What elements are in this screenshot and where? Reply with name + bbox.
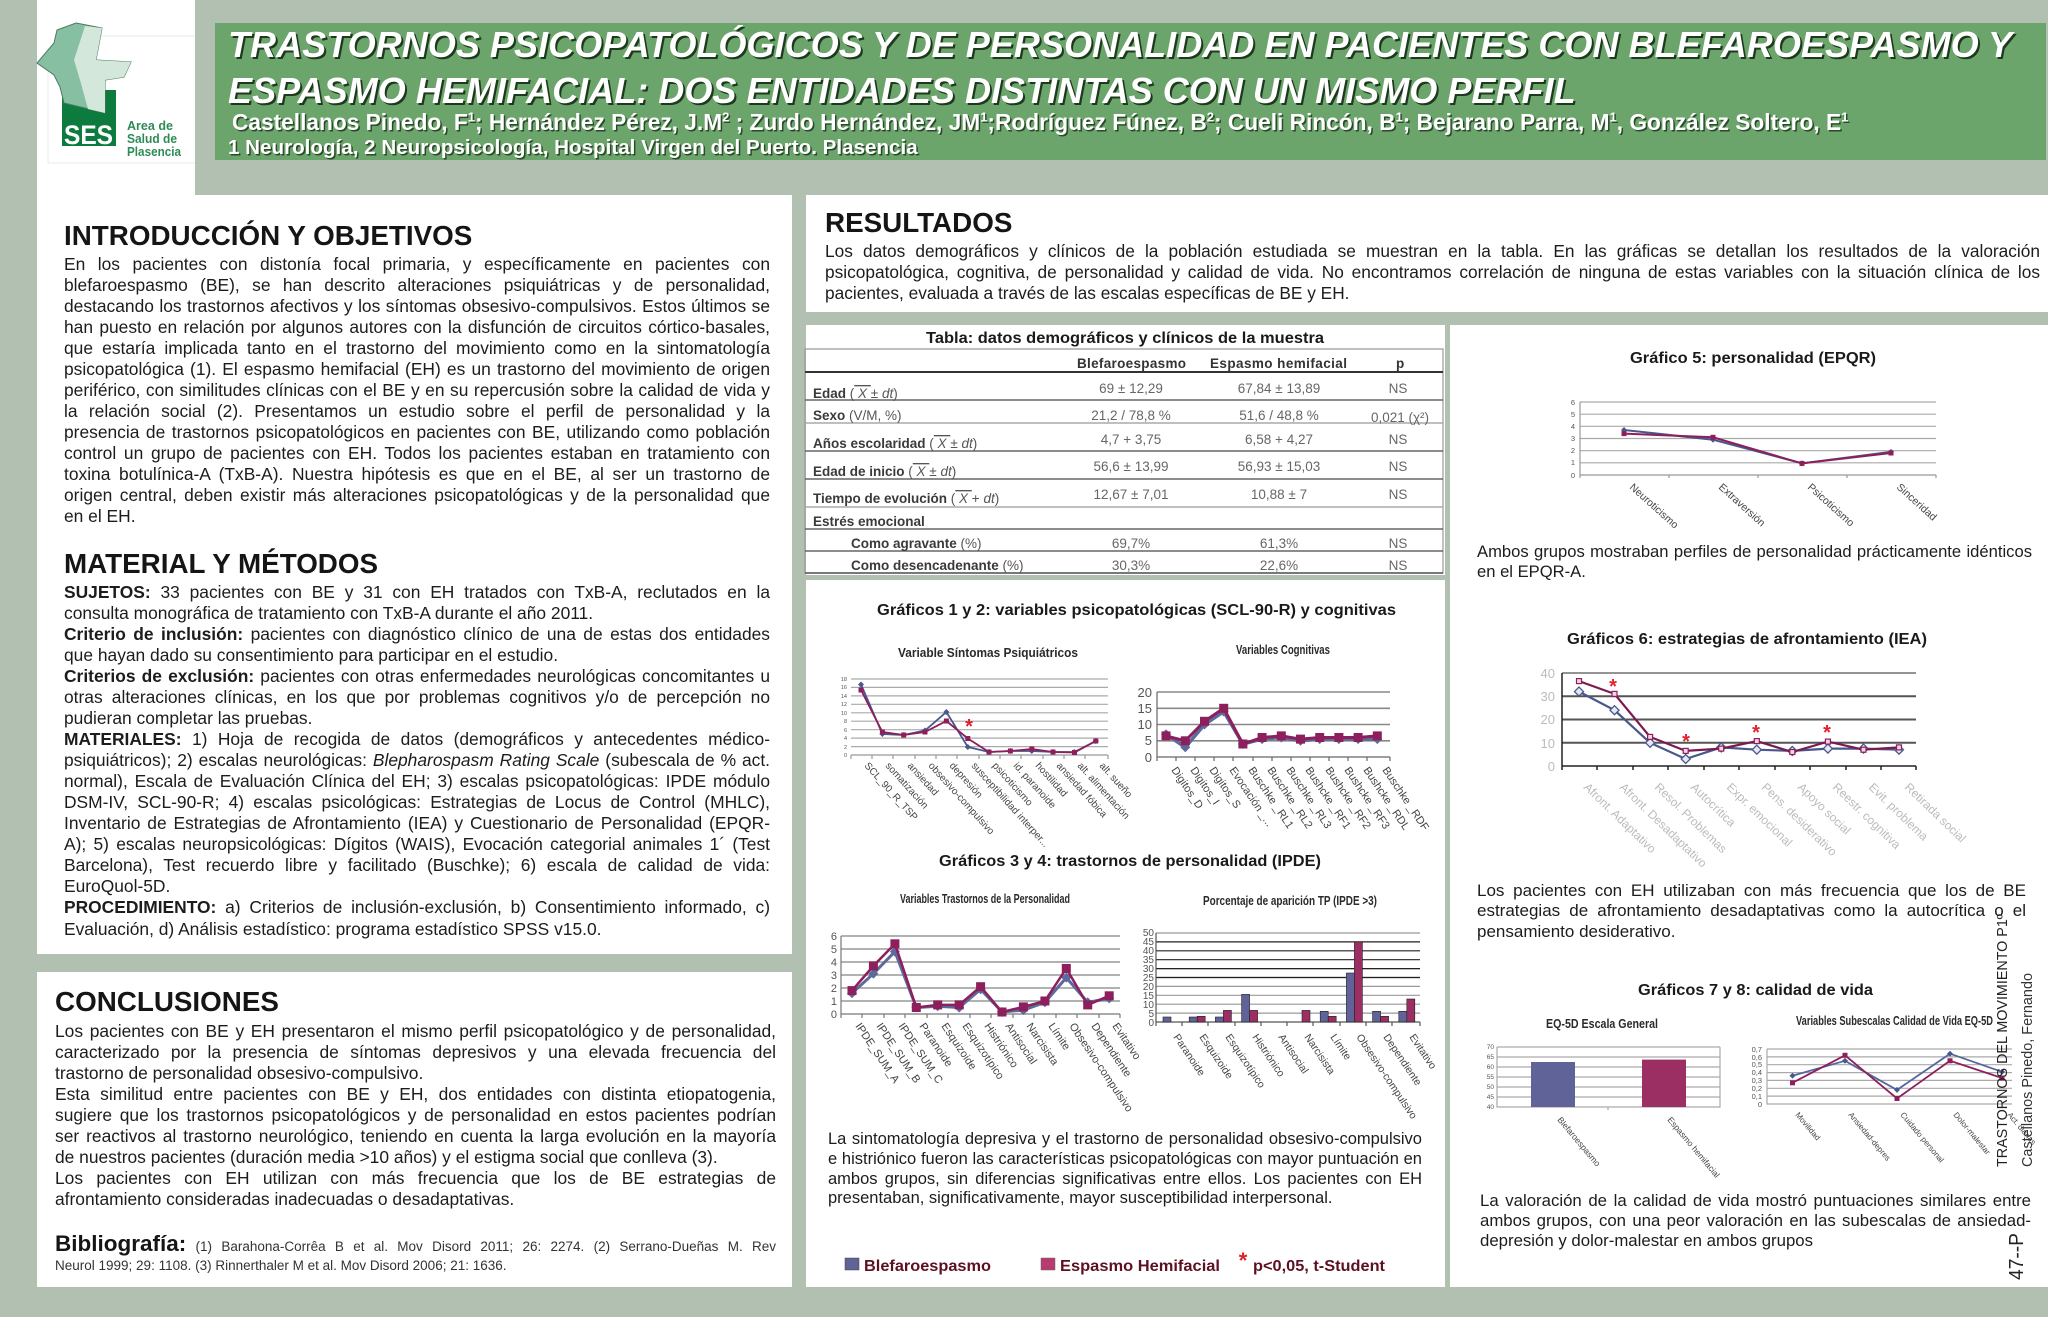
text: introducción: presencia de trastornos psicopatológicos en pacientes con BE, utilizando como población bbox=[64, 422, 770, 442]
chart 4: porcentaje de aparición TP: Narcisista bbox=[1302, 1032, 1337, 1077]
chart 4: porcentaje de aparición TP: Antisocial bbox=[1276, 1032, 1311, 1076]
chart 7: EQ-5D escala general: 50 bbox=[1487, 1084, 1494, 1091]
chart 6: estrategias de afrontamiento: Autocrítica bbox=[1688, 780, 1739, 830]
row: como desencadenante bbox=[851, 558, 1407, 573]
text: introducción: que estaría implicada tanto en el trastorno del movimiento como en la sintomatología bbox=[64, 338, 770, 358]
chart 1: variable síntomas psiquiátricos: somatización bbox=[883, 761, 930, 811]
chart 3: variables trastornos de la personalidad: 6 bbox=[831, 931, 837, 943]
heading: gráficos 1 y 2: Gráficos 1 y 2: variables psicopatológicas (SCL-90-R) y cognitivas bbox=[877, 602, 1396, 619]
chart 7: EQ-5D escala general: 55 bbox=[1487, 1074, 1494, 1081]
chart 7: EQ-5D escala general: 70 bbox=[1487, 1044, 1494, 1051]
vertical label: autor: Castellanos Pinedo, Fernando bbox=[2020, 973, 2036, 1167]
chart 3: variables trastornos de la personalidad: 2 bbox=[831, 983, 837, 995]
text: material y métodos: DSM-IV, SCL-90-R; 4) escalas psicológicas: Estrategias de Locus de Control (MHLC), bbox=[64, 792, 770, 812]
text: introducción bbox=[64, 254, 770, 526]
chart 8: variables subescalas calidad de vida: Cuidado personal bbox=[1898, 1111, 1946, 1164]
significance stars: * bbox=[1823, 722, 1831, 744]
row: edad: 67,84 ± 13,89 bbox=[1238, 381, 1320, 396]
panel: resultados bbox=[806, 195, 2048, 312]
chart 5: personalidad EPQR: 6 bbox=[1571, 398, 1575, 407]
panel: logo background bbox=[37, 0, 195, 196]
table header: Espasmo hemifacial bbox=[1210, 356, 1347, 371]
text: sintomatología bbox=[828, 1130, 1422, 1207]
chart 7: EQ-5D escala general: Espasmo hemifacial bbox=[1665, 1115, 1722, 1180]
chart 5: personalidad EPQR: 3 bbox=[1571, 434, 1575, 443]
chart 1: variable síntomas psiquiátricos: alt. sueño bbox=[1097, 761, 1134, 801]
text: afrontamiento: Los pacientes con EH utilizaban con más frecuencia que los de BE bbox=[1477, 881, 2026, 900]
chart 7: EQ-5D escala general: EQ-5D Escala General bbox=[1546, 1016, 1658, 1031]
chart 5: personalidad EPQR: 5 bbox=[1571, 410, 1575, 419]
text: conclusiones: de nuestros pacientes (duración media >10 años) y el estigma social que conlleva (3). bbox=[55, 1147, 718, 1167]
title: ESPASMO HEMIFACIAL: DOS ENTIDADES DISTINTAS CON UN MISMO PERFIL bbox=[228, 70, 1576, 111]
chart 4: porcentaje de aparición TP: 15 bbox=[1143, 991, 1154, 1002]
chart 7: EQ-5D escala general: 65 bbox=[1487, 1054, 1494, 1061]
chart 1: variable síntomas psiquiátricos: 18 bbox=[841, 677, 847, 683]
significance stars: * bbox=[1609, 676, 1617, 698]
row: como agravante: Como agravante (%) bbox=[851, 536, 982, 551]
heading: introducción: INTRODUCCIÓN Y OBJETIVOS bbox=[64, 220, 472, 251]
text: afrontamiento: estrategias de afrontamiento desadaptativas como la autocrítica o el bbox=[1477, 901, 2026, 920]
row: edad: Edad ( X ± dt) bbox=[813, 386, 898, 401]
row: años escolaridad bbox=[813, 432, 1407, 451]
chart 4: porcentaje de aparición TP: 20 bbox=[1143, 982, 1154, 993]
chart 2: variables cognitivas: Bushcke _RDL bbox=[1361, 765, 1411, 833]
text: sintomatología: La sintomatología depresiva y el trastorno de personalidad obsesivo-compulsivo bbox=[828, 1130, 1422, 1148]
row: sexo: 21,2 / 78,8 % bbox=[1091, 408, 1171, 423]
text: introducción: blefaroespasmo (BE), se han descrito alteraciones psiquiátricas y de personalidad, bbox=[64, 275, 770, 295]
text: conclusiones: Los pacientes con EH utilizan con más frecuencia que los de BE estrategias de bbox=[55, 1168, 776, 1188]
chart 4: porcentaje de aparición TP: 40 bbox=[1143, 946, 1154, 957]
text: conclusiones: afrontamiento consideradas inadecuadas o desadaptativas. bbox=[55, 1189, 514, 1209]
text: material y métodos: otras alteraciones clínicas, en los que por problemas cognitivos y/o de percepción no bbox=[64, 687, 770, 707]
text: sintomatología: ambos grupos, sin diferencias significativas entre ellos. Los pacientes con EH bbox=[828, 1170, 1422, 1188]
text: material y métodos: que hayan dado su consentimiento para participar en el estudio. bbox=[64, 645, 558, 665]
table header: Blefaroespasmo bbox=[1077, 356, 1186, 371]
row: años escolaridad: NS bbox=[1389, 432, 1407, 447]
text: material y métodos: A); 5) escalas neuropsicológicas: Dígitos (WAIS), Evocación categorial animales 1´ (Test bbox=[64, 834, 770, 854]
chart 1: variable síntomas psiquiátricos: ansiedad fóbica bbox=[1054, 761, 1109, 820]
table header bbox=[1077, 356, 1404, 371]
chart 4: porcentaje de aparición TP bbox=[1143, 893, 1439, 1122]
chart 6: estrategias de afrontamiento: Retirada social bbox=[1902, 780, 1969, 845]
text: calidad de vida: ambos grupos, con una peor valoración en las subescalas de ansiedad- bbox=[1480, 1211, 2031, 1230]
row: edad bbox=[813, 381, 1407, 401]
chart 8: variables subescalas calidad de vida: 0,4 bbox=[1752, 1068, 1762, 1077]
chart 1: variable síntomas psiquiátricos: 6 bbox=[844, 728, 847, 734]
significance stars bbox=[1609, 676, 1831, 753]
text: introducción: han puesto en relación por algunos autores con la disfunción de circuitos córtico-basales, bbox=[64, 317, 770, 337]
row: edad de inicio: 56,6 ± 13,99 bbox=[1094, 459, 1168, 474]
chart 8: variables subescalas calidad de vida: Act. diarias bbox=[2005, 1111, 2038, 1147]
chart 6: estrategias de afrontamiento: Afront. Desadaptativo bbox=[1617, 780, 1710, 871]
chart 2: variables cognitivas: Digitos_D bbox=[1169, 765, 1205, 811]
chart 1: variable síntomas psiquiátricos: Variable Síntomas Psiquiátricos bbox=[898, 645, 1078, 660]
chart 1: variable síntomas psiquiátricos: ansiedad bbox=[905, 761, 940, 798]
chart 7: EQ-5D escala general: Blefaroespasmo bbox=[1555, 1115, 1603, 1169]
chart 1: variable síntomas psiquiátricos: 0 bbox=[844, 753, 847, 759]
chart 5: personalidad EPQR: 2 bbox=[1571, 446, 1575, 455]
chart 3: variables trastornos de la personalidad: Paranoide bbox=[917, 1021, 955, 1069]
chart 7: EQ-5D escala general: 45 bbox=[1487, 1094, 1494, 1101]
text: introducción: en el EH. bbox=[64, 506, 136, 526]
chart 1: variable síntomas psiquiátricos: 10 bbox=[841, 711, 847, 717]
chart 2: variables cognitivas: Bushcke _RF2 bbox=[1323, 765, 1373, 831]
row: como agravante: NS bbox=[1389, 536, 1407, 551]
text: material y métodos: pudieran completar las pruebas. bbox=[64, 708, 312, 728]
row: edad: 69 ± 12,29 bbox=[1099, 381, 1163, 396]
chart 1: variable síntomas psiquiátricos: obsesivo-compulsivo bbox=[926, 761, 996, 837]
chart 3: variables trastornos de la personalidad: Narcisista bbox=[1024, 1021, 1061, 1068]
chart 3: variables trastornos de la personalidad: Dependiente bbox=[1089, 1021, 1133, 1079]
heading: gráficos 3 y 4: Gráficos 3 y 4: trastornos de personalidad (IPDE) bbox=[939, 853, 1321, 870]
chart 6: estrategias de afrontamiento: 40 bbox=[1541, 666, 1555, 681]
panel: charts 1 to 4 bbox=[806, 580, 1445, 1287]
chart 1: variable síntomas psiquiátricos: 4 bbox=[844, 736, 847, 742]
text: conclusiones: caracterizado por la presencia de síntomas depresivos y una elevada frecuencia del bbox=[55, 1042, 776, 1062]
panel: charts 5 to 8 bbox=[1450, 325, 2048, 1287]
text: afrontamiento bbox=[1477, 881, 2026, 941]
chart 8: variables subescalas calidad de vida bbox=[1752, 1013, 2038, 1164]
chart 7: EQ-5D escala general: 40 bbox=[1487, 1104, 1494, 1111]
chart 6: estrategias de afrontamiento: 30 bbox=[1541, 689, 1555, 704]
chart 2: variables cognitivas: Buschke _RDF bbox=[1380, 765, 1431, 833]
legend: significance: * bbox=[1239, 1248, 1248, 1273]
text: calidad de vida: La valoración de la calidad de vida mostró puntuaciones similares entre bbox=[1480, 1191, 2031, 1210]
chart 5: personalidad EPQR: 0 bbox=[1571, 471, 1575, 480]
text: conclusiones: Esta similitud entre pacientes con BE y EH, dos entidades con distinta etiopatogenia, bbox=[55, 1084, 776, 1104]
text: resultados: Los datos demográficos y clínicos de la población estudiada se muestran en la tabla. En las gráficas se detallan los resultados de la valoración bbox=[825, 240, 2040, 260]
text: material y métodos bbox=[64, 582, 770, 938]
text: material y métodos: EuroQuol-5D. bbox=[64, 876, 170, 896]
chart 4: porcentaje de aparición TP: 0 bbox=[1148, 1018, 1154, 1029]
text: EPQR: Ambos grupos mostraban perfiles de personalidad prácticamente idénticos bbox=[1477, 542, 2032, 561]
chart 3: variables trastornos de la personalidad bbox=[831, 891, 1143, 1114]
row: tiempo de evolución bbox=[813, 487, 1407, 506]
chart 8: variables subescalas calidad de vida: 0,1 bbox=[1752, 1092, 1762, 1101]
chart 6: estrategias de afrontamiento bbox=[1541, 666, 1969, 871]
chart 2: variables cognitivas: 5 bbox=[1145, 733, 1152, 748]
chart 6: estrategias de afrontamiento: Afront. Adaptativo bbox=[1581, 780, 1659, 856]
chart 2: variables cognitivas bbox=[1138, 642, 1431, 833]
chart 3: variables trastornos de la personalidad: IPDE_SUM_C bbox=[896, 1021, 945, 1086]
chart 2: variables cognitivas: Buschke _RL2 bbox=[1265, 765, 1314, 831]
text: calidad de vida: depresión y dolor-malestar en ambos grupos bbox=[1480, 1231, 1813, 1250]
text: material y métodos: Criterios de exclusión: pacientes con otras enfermedades neurológicas concomitantes u bbox=[64, 666, 770, 686]
chart 3: variables trastornos de la personalidad: 0 bbox=[831, 1009, 837, 1021]
logo: SES Área de Salud de Plasencia bbox=[37, 23, 195, 163]
significance star: * bbox=[965, 716, 973, 738]
text: material y métodos: consulta monográfica de tratamiento con TxB-A durante el año 2011. bbox=[64, 603, 593, 623]
chart 3: variables trastornos de la personalidad: Límite bbox=[1046, 1021, 1072, 1053]
chart 6: estrategias de afrontamiento: Evit. problema bbox=[1866, 780, 1931, 844]
chart 4: porcentaje de aparición TP: 30 bbox=[1143, 964, 1154, 975]
chart 1: variable síntomas psiquiátricos: SCL_90_R_TSP bbox=[862, 761, 920, 823]
chart 4: porcentaje de aparición TP: 50 bbox=[1143, 928, 1154, 939]
row: tiempo de evolución: Tiempo de evolución ( X + dt) bbox=[813, 491, 999, 506]
text: resultados: pacientes, evaluada a través de las escalas específicas de BE y EH. bbox=[825, 283, 1350, 303]
text: introducción: psicopatológica (1). El espasmo hemifacial (EH) es un trastorno del movimiento de origen bbox=[64, 359, 770, 379]
chart 8: variables subescalas calidad de vida: 0,5 bbox=[1752, 1060, 1762, 1069]
chart 3: variables trastornos de la personalidad: Variables Trastornos de la Personalidad bbox=[900, 891, 1070, 906]
panel: introducción y material y métodos bbox=[37, 195, 792, 954]
text: material y métodos: psiquiátricos); 2) escalas neurológicas: Blepharospasm Rating Scale (subescala de % act. bbox=[64, 750, 770, 770]
chart 3: variables trastornos de la personalidad: Esquizotípico bbox=[960, 1021, 1006, 1082]
title banner bbox=[215, 23, 2046, 160]
text: introducción: control un grupo de pacientes con EH. Todos los pacientes estaban en tratamiento con bbox=[64, 443, 770, 463]
chart 3: variables trastornos de la personalidad: Evitativo bbox=[1110, 1021, 1143, 1062]
chart 8: variables subescalas calidad de vida: Ansiedad-depres bbox=[1846, 1111, 1892, 1163]
chart 3: variables trastornos de la personalidad: Antisocial bbox=[1003, 1021, 1039, 1067]
text: calidad de vida bbox=[1480, 1191, 2031, 1250]
table title: Tabla: datos demográficos y clínicos de la muestra bbox=[926, 330, 1324, 347]
chart 1: variable síntomas psiquiátricos: id. paranoide bbox=[1011, 761, 1058, 811]
chart 6: estrategias de afrontamiento: Pens. desiderativo bbox=[1759, 780, 1840, 859]
chart 3: variables trastornos de la personalidad: IPDE_SUM_B bbox=[874, 1021, 922, 1085]
legend: espasmo hemifacial: Espasmo Hemifacial bbox=[1060, 1258, 1220, 1275]
legend bbox=[845, 1248, 1386, 1275]
text: afrontamiento: pensamiento desiderativo. bbox=[1477, 922, 1675, 941]
row: tiempo de evolución: NS bbox=[1389, 487, 1407, 502]
heading: resultados: RESULTADOS bbox=[825, 207, 1012, 238]
row: edad de inicio bbox=[813, 459, 1407, 479]
chart 8: variables subescalas calidad de vida: 0 bbox=[1758, 1100, 1762, 1109]
chart 4: porcentaje de aparición TP: Dependiente bbox=[1381, 1032, 1424, 1088]
text: conclusiones bbox=[55, 1020, 776, 1209]
chart 4: porcentaje de aparición TP: Histriónico bbox=[1250, 1032, 1287, 1079]
text: conclusiones: sugiere que los trastornos psicopatológicos y de personalidad en estos pacientes podrían bbox=[55, 1105, 776, 1125]
bibliography bbox=[55, 1231, 776, 1273]
row: sexo: Sexo (V/M, %) bbox=[813, 408, 902, 423]
chart 4: porcentaje de aparición TP: Evitativo bbox=[1407, 1032, 1439, 1072]
text: material y métodos: Criterio de inclusión: pacientes con diagnóstico clínico de una de estas dos entidades bbox=[64, 624, 770, 644]
chart 6: estrategias de afrontamiento: Resol. Problemas bbox=[1652, 780, 1730, 856]
chart 1: variable síntomas psiquiátricos: hostilidad bbox=[1033, 761, 1069, 799]
chart 2: variables cognitivas: Buschke _RL3 bbox=[1284, 765, 1333, 831]
chart 4: porcentaje de aparición TP: Límite bbox=[1328, 1032, 1354, 1063]
chart 5: personalidad EPQR: 4 bbox=[1571, 422, 1575, 431]
logo text: area: Plasencia bbox=[127, 145, 182, 159]
text: introducción: En los pacientes con distonía focal primaria, y específicamente en pacientes con bbox=[64, 254, 770, 274]
legend: blefaroespasmo: Blefaroespasmo bbox=[864, 1258, 991, 1275]
chart 2: variables cognitivas: 10 bbox=[1138, 717, 1152, 732]
chart 5: personalidad EPQR: Sinceridad bbox=[1894, 481, 1939, 524]
chart 2: variables cognitivas: 0 bbox=[1145, 750, 1152, 765]
heading: gráficos 7 y 8: Gráficos 7 y 8: calidad de vida bbox=[1638, 982, 1873, 999]
chart 6: estrategias de afrontamiento: 10 bbox=[1541, 736, 1555, 751]
chart 7: EQ-5D escala general bbox=[1487, 1016, 1722, 1180]
text: resultados: psicopatológica, cognitiva, de personalidad y calidad de vida. No encontramos correlación de ninguna de estas variables con la situación clínica de los bbox=[825, 262, 2040, 282]
chart 2: variables cognitivas: Variables Cognitivas bbox=[1236, 642, 1330, 657]
authors: Castellanos Pinedo, F1; Hernández Pérez, J.M2 ; Zurdo Hernández, JM1;Rodríguez Fúnez, B2; Cueli Rincón, B1; Bejarano Parra, M1, González Soltero, E1 bbox=[232, 109, 1848, 135]
chart 1: variable síntomas psiquiátricos: 2 bbox=[844, 745, 847, 751]
chart 3: variables trastornos de la personalidad: IPDE_SUM_A bbox=[853, 1021, 902, 1086]
chart 1: variable síntomas psiquiátricos: susceptibilidad interper... bbox=[969, 761, 1051, 850]
chart 6: estrategias de afrontamiento: Expr. emocional bbox=[1724, 780, 1795, 849]
row: sexo: 51,6 / 48,8 % bbox=[1239, 408, 1319, 423]
chart 2: variables cognitivas: 20 bbox=[1138, 685, 1152, 700]
chart 5: personalidad EPQR: Neuroticismo bbox=[1627, 481, 1681, 531]
chart 5: personalidad EPQR bbox=[1571, 398, 1939, 531]
text: material y métodos: Barcelona), Test recuerdo libre y facilitado (Buschke); 6) escala de calidad de vida: bbox=[64, 855, 770, 875]
chart 1: variable síntomas psiquiátricos bbox=[841, 645, 1134, 850]
table header: p bbox=[1396, 356, 1404, 371]
chart 7: EQ-5D escala general: 60 bbox=[1487, 1064, 1494, 1071]
text: material y métodos: Evaluación, d) Análisis estadístico: programa estadístico SPSS v15.0. bbox=[64, 918, 601, 938]
heading: gráficos 6: Gráficos 6: estrategias de afrontamiento (IEA) bbox=[1567, 631, 1927, 648]
text: material y métodos: MATERIALES: 1) Hoja de recogida de datos (demográficos y antecedentes médico- bbox=[64, 729, 770, 749]
chart 1: variable síntomas psiquiátricos: 16 bbox=[841, 685, 847, 691]
text: conclusiones: trastorno de personalidad obsesivo-compulsivo. bbox=[55, 1063, 423, 1083]
vertical label: poster number: 47--P bbox=[2006, 1233, 2028, 1280]
row: años escolaridad: 6,58 + 4,27 bbox=[1245, 432, 1313, 447]
text: introducción: la relación social (2). Presentamos un estudio sobre el perfil de personalidad y la bbox=[64, 401, 770, 421]
text: introducción: toxina botulínica-A (TxB-A). Nuestra hipótesis es que en el BE, al ser un trastorno de bbox=[64, 464, 770, 484]
title bbox=[228, 24, 2017, 111]
chart 1: variable síntomas psiquiátricos: alt. alimentación bbox=[1075, 761, 1131, 822]
text: material y métodos: PROCEDIMIENTO: a) Criterios de inclusión-exclusión, b) Consentimiento informado, c) bbox=[64, 897, 770, 917]
chart 5: personalidad EPQR: Psicoticismo bbox=[1805, 481, 1856, 529]
chart 1: variable síntomas psiquiátricos: 12 bbox=[841, 702, 847, 708]
text: material y métodos: Inventario de Estrategias de Afrontamiento (IEA) y Cuestionario de Personalidad (EPQR- bbox=[64, 813, 770, 833]
text: introducción: destacando los trastornos afectivos y los síntomas obsesivo-compulsivos. Estos últimos se bbox=[64, 296, 770, 316]
chart 3: variables trastornos de la personalidad: 5 bbox=[831, 944, 837, 956]
chart 2: variables cognitivas: Digitos_I bbox=[1188, 765, 1221, 807]
bibliography: Bibliografía: (1) Barahona-Corrêa B et al. Mov Disord 2011; 26: 2274. (2) Serrano-Dueñas M. Rev bbox=[55, 1231, 776, 1256]
significance stars: * bbox=[1682, 731, 1690, 753]
chart 3: variables trastornos de la personalidad: 4 bbox=[831, 957, 837, 969]
chart 4: porcentaje de aparición TP: Esquizoide bbox=[1197, 1032, 1235, 1081]
affiliations: 1 Neurología, 2 Neuropsicología, Hospital Virgen del Puerto. Plasencia bbox=[228, 136, 918, 159]
chart 2: variables cognitivas: Digitos_S bbox=[1207, 765, 1243, 811]
row: estrés emocional: Estrés emocional bbox=[813, 514, 925, 529]
row: tiempo de evolución: 10,88 ± 7 bbox=[1251, 487, 1307, 502]
text: material y métodos: normal), Escala de Evaluación Clínica del EH; 3) escalas psicopatológicas: IPDE módulo bbox=[64, 771, 770, 791]
text: EPQR: en el EPQR-A. bbox=[1477, 562, 1586, 581]
chart 8: variables subescalas calidad de vida: 0,7 bbox=[1752, 1045, 1762, 1054]
heading: conclusiones: CONCLUSIONES bbox=[55, 986, 279, 1017]
text: EPQR bbox=[1477, 542, 2032, 581]
text: resultados bbox=[825, 240, 2040, 303]
chart 2: variables cognitivas: Evocación _... bbox=[1227, 765, 1275, 829]
chart 4: porcentaje de aparición TP: Paranoide bbox=[1171, 1032, 1207, 1078]
chart 4: porcentaje de aparición TP: 45 bbox=[1143, 937, 1154, 948]
row: como agravante: 69,7% bbox=[1112, 536, 1150, 551]
chart 6: estrategias de afrontamiento: 0 bbox=[1548, 759, 1555, 774]
row: como agravante: 61,3% bbox=[1260, 536, 1298, 551]
text: conclusiones: Los pacientes con BE y EH presentaron el mismo perfil psicopatológico y de personalidad, bbox=[55, 1020, 776, 1040]
text: sintomatología: presentaban, significativamente, mayor susceptibilidad interpersonal. bbox=[828, 1189, 1332, 1207]
chart 6: estrategias de afrontamiento: Apoyo social bbox=[1795, 780, 1854, 837]
chart 4: porcentaje de aparición TP: 10 bbox=[1143, 1000, 1154, 1011]
row: años escolaridad: 4,7 + 3,75 bbox=[1101, 432, 1161, 447]
chart 3: variables trastornos de la personalidad: 1 bbox=[831, 996, 837, 1008]
chart 2: variables cognitivas: Buschke _RL1 bbox=[1246, 765, 1295, 831]
row: como desencadenante: 30,3% bbox=[1112, 558, 1150, 573]
heading: material y métodos: MATERIAL Y MÉTODOS bbox=[64, 548, 378, 579]
chart 8: variables subescalas calidad de vida: Dolor-malestar bbox=[1951, 1111, 1992, 1157]
text: material y métodos: SUJETOS: 33 pacientes con BE y 31 con EH tratados con TxB-A, reclutados en la bbox=[64, 582, 770, 602]
text: introducción: origen central, deben existir más alteraciones psicopatológicas y de la personalidad que bbox=[64, 485, 770, 505]
chart 4: porcentaje de aparición TP: Esquizotípico bbox=[1223, 1032, 1267, 1091]
logo wordmark: SES: SES bbox=[64, 120, 113, 150]
chart 3: variables trastornos de la personalidad: Obsesivo-compulsivo bbox=[1067, 1021, 1135, 1114]
chart 6: estrategias de afrontamiento: Reestr. cognitiva bbox=[1830, 780, 1904, 852]
row: sexo bbox=[813, 408, 1429, 425]
table: datos demográficos y clínicos bbox=[805, 330, 1443, 573]
row: edad de inicio: NS bbox=[1389, 459, 1407, 474]
row: edad de inicio: 56,93 ± 15,03 bbox=[1238, 459, 1320, 474]
title: TRASTORNOS PSICOPATOLÓGICOS Y DE PERSONALIDAD EN PACIENTES CON BLEFAROESPASMO Y bbox=[228, 24, 2012, 65]
row: como agravante bbox=[851, 536, 1407, 551]
chart 8: variables subescalas calidad de vida: 0,2 bbox=[1752, 1084, 1762, 1093]
chart 4: porcentaje de aparición TP: Obsesivo-compulsivo bbox=[1354, 1032, 1419, 1122]
chart 3: variables trastornos de la personalidad: Esquizoide bbox=[939, 1021, 979, 1072]
row: sexo: 0,021 (χ²) bbox=[1371, 410, 1429, 425]
chart 4: porcentaje de aparición TP: Porcentaje de aparición TP (IPDE >3) bbox=[1203, 893, 1377, 908]
chart 8: variables subescalas calidad de vida: 0,3 bbox=[1752, 1076, 1762, 1085]
row: como desencadenante: Como desencadenante (%) bbox=[851, 558, 1024, 573]
chart 3: variables trastornos de la personalidad: Histriónico bbox=[982, 1021, 1020, 1070]
chart 6: estrategias de afrontamiento: 20 bbox=[1541, 712, 1555, 727]
chart 8: variables subescalas calidad de vida: 0,6 bbox=[1752, 1053, 1762, 1062]
logo text: area: Area de bbox=[127, 119, 173, 133]
chart 3: variables trastornos de la personalidad: 3 bbox=[831, 970, 837, 982]
chart 2: variables cognitivas: Bushcke _RF1 bbox=[1303, 765, 1353, 831]
legend: significance: p<0,05, t-Student bbox=[1253, 1258, 1386, 1275]
chart 4: porcentaje de aparición TP: 5 bbox=[1148, 1009, 1154, 1020]
heading: gráfico 5: Gráfico 5: personalidad (EPQR) bbox=[1630, 350, 1876, 367]
row: edad: NS bbox=[1389, 381, 1407, 396]
text: sintomatología: e histriónico fueron las características psicopatológicas con mayor puntuación en bbox=[828, 1150, 1422, 1168]
row: años escolaridad: Años escolaridad ( X ± dt) bbox=[813, 436, 977, 451]
bibliography: Neurol 1999; 29: 1108. (3) Rinnerthaler M et al. Mov Disord 2006; 21: 1636. bbox=[55, 1258, 507, 1273]
chart 1: variable síntomas psiquiátricos: depresión bbox=[947, 761, 984, 801]
panel: table background bbox=[806, 325, 1445, 575]
legend: significance bbox=[1239, 1248, 1386, 1275]
chart 2: variables cognitivas: Bushcke _RF3 bbox=[1342, 765, 1392, 831]
text: conclusiones: ser reactivos al trastorno neurológico, teniendo en cuenta la larga evolución en la mayoría bbox=[55, 1126, 776, 1146]
vertical label: trastornos del movimiento: TRASTORNOS DEL MOVIMIENTO P1º bbox=[1995, 913, 2011, 1167]
panel: conclusiones bbox=[37, 972, 792, 1287]
chart 1: variable síntomas psiquiátricos: 14 bbox=[841, 694, 847, 700]
chart 1: variable síntomas psiquiátricos: 8 bbox=[844, 719, 847, 725]
row: edad de inicio: Edad de inicio ( X ± dt) bbox=[813, 464, 956, 479]
chart 1: variable síntomas psiquiátricos: psicoticismo bbox=[990, 761, 1035, 809]
chart 2: variables cognitivas: 15 bbox=[1138, 701, 1152, 716]
chart 8: variables subescalas calidad de vida: Movilidad bbox=[1793, 1111, 1822, 1142]
logo text: area: Salud de bbox=[127, 132, 177, 146]
row: como desencadenante: NS bbox=[1389, 558, 1407, 573]
chart 5: personalidad EPQR: Extraversión bbox=[1716, 481, 1768, 529]
significance stars: * bbox=[1752, 722, 1760, 744]
chart 4: porcentaje de aparición TP: 25 bbox=[1143, 973, 1154, 984]
row: tiempo de evolución: 12,67 ± 7,01 bbox=[1094, 487, 1168, 502]
chart 5: personalidad EPQR: 1 bbox=[1571, 458, 1575, 467]
text: introducción: periférico, con similitudes clínicas con el BE y en su repercusión sobre la calidad de vida y bbox=[64, 380, 770, 400]
row: como desencadenante: 22,6% bbox=[1260, 558, 1298, 573]
chart 4: porcentaje de aparición TP: 35 bbox=[1143, 955, 1154, 966]
